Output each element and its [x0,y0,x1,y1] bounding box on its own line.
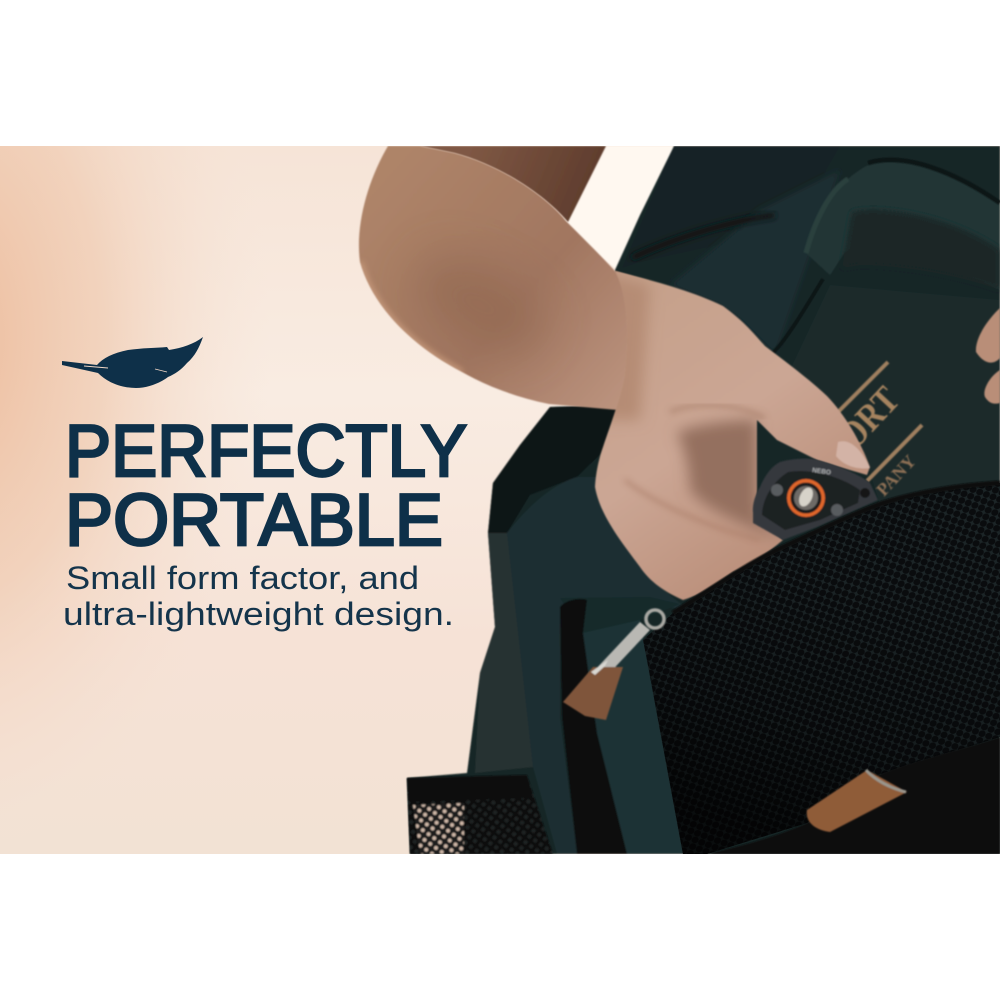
front pouch panel [507,477,690,854]
lower right panel [790,285,1000,505]
subtitle [63,560,454,632]
brand mark: NEBO [812,467,831,477]
embroidered logo: ORT [831,379,908,457]
mid teal panel [676,177,834,350]
embroidered logo: PANY [872,451,920,500]
arm [359,146,649,412]
title: PERFECTLY [65,411,467,492]
top flap panel [806,158,1000,290]
title [65,411,467,561]
pocket teal [583,620,683,854]
screws [771,484,783,496]
bottom strap [707,737,1000,854]
side mesh pocket [407,775,553,854]
title: PORTABLE [65,480,443,561]
subtitle: Small form factor, and [66,560,419,596]
upper dark shoulder panel [674,146,675,147]
shoulder seam [773,279,823,353]
backpack body [407,146,1000,854]
second hand fingers [976,308,1000,404]
icon: feather [62,337,203,388]
flap piping [868,160,1000,203]
side strip [475,533,533,773]
zipper pull [563,610,664,720]
embroidered logo [831,362,922,500]
mesh pocket [643,483,1000,854]
thumbnail [836,441,870,468]
black webbing [560,599,627,854]
palm shadow gap [677,420,783,540]
black collar [487,406,615,533]
blend wrist into arm [612,273,652,424]
flashlight [753,459,878,540]
bright sky gap [564,146,674,268]
subtitle: ultra-lightweight design. [63,596,454,632]
hand holding light [595,270,870,600]
lens ring [787,479,825,517]
photo background: sunset sky [0,146,1000,854]
brown shadowed upper arm behind [420,146,606,222]
photo scene: person with backpack [359,146,1000,854]
leather tab [807,770,907,832]
